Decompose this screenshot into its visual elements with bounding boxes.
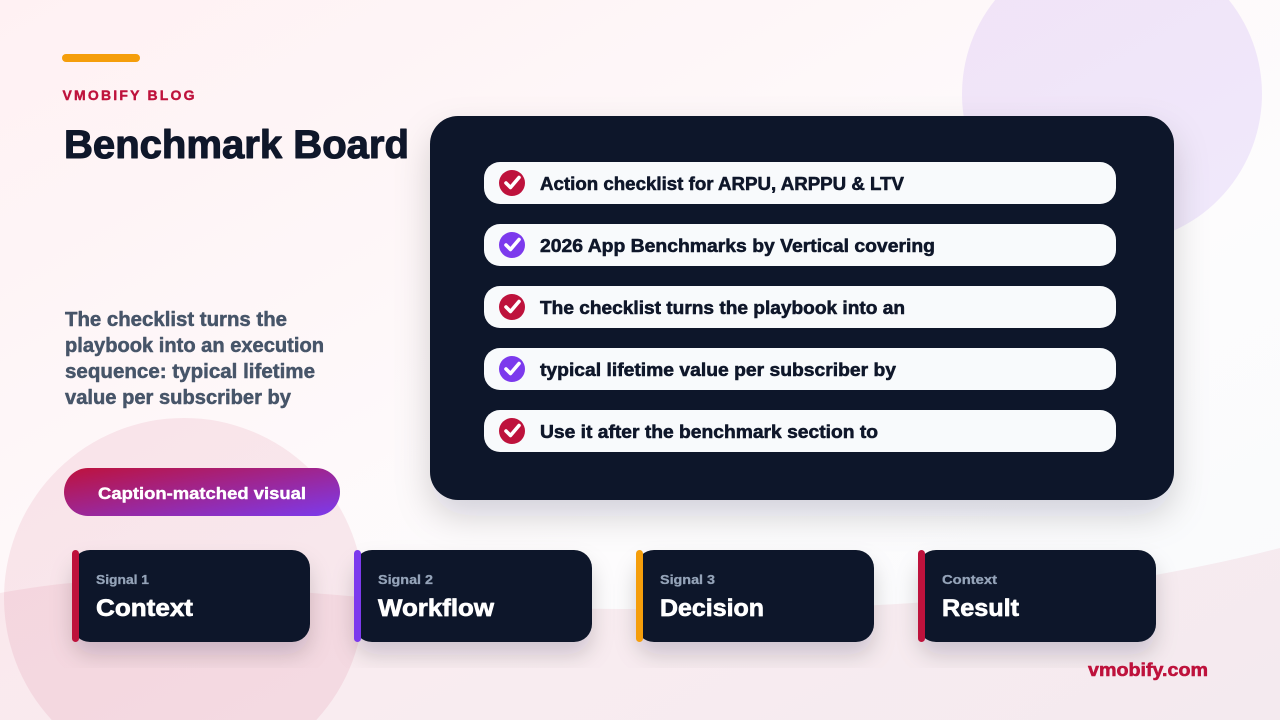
- description text block: value per subscriber by: [65, 387, 292, 409]
- card: result: Context: [942, 572, 998, 587]
- panel: checklist: [430, 116, 1174, 500]
- card: context: Context: [96, 595, 193, 622]
- card: decision: Decision: [660, 595, 764, 622]
- card: context: [72, 550, 310, 642]
- checklist row 5: Use it after the benchmark section to: [540, 422, 878, 442]
- description text block: sequence: typical lifetime: [65, 361, 315, 383]
- description text block: [65, 309, 324, 409]
- card: workflow: [354, 550, 592, 642]
- title: Benchmark Board: [64, 123, 409, 167]
- card: decision: Signal 3: [660, 572, 715, 587]
- checklist row 3: The checklist turns the playbook into an: [540, 298, 905, 318]
- decorative pink circle: [4, 418, 364, 720]
- decorative bottom wave: [0, 548, 1280, 720]
- checklist row 4: [484, 348, 1116, 390]
- pill badge: Caption-matched visual: [98, 485, 306, 503]
- checklist row 4: typical lifetime value per subscriber by: [540, 360, 896, 380]
- eyebrow: VMOBIFY BLOG: [62, 87, 195, 103]
- accent bar: [62, 54, 140, 62]
- card: result: Result: [942, 595, 1019, 622]
- decorative purple circle: [962, 0, 1262, 244]
- checklist row 3: [484, 286, 1116, 328]
- checklist row 2: [484, 224, 1116, 266]
- checklist row 1: Action checklist for ARPU, ARPPU & LTV: [540, 174, 904, 194]
- checklist row 2: 2026 App Benchmarks by Vertical covering: [540, 236, 935, 256]
- pill badge: [64, 468, 340, 516]
- footer url: vmobify.com: [1088, 660, 1208, 680]
- card: workflow: Workflow: [378, 595, 494, 622]
- description text block: playbook into an execution: [65, 335, 324, 357]
- card: decision: [636, 550, 874, 642]
- checklist row 1: [484, 162, 1116, 204]
- card: result: [918, 550, 1156, 642]
- card: context: Signal 1: [96, 572, 149, 587]
- description text block: The checklist turns the: [65, 309, 287, 331]
- card: workflow: Signal 2: [378, 572, 433, 587]
- checklist row 5: [484, 410, 1116, 452]
